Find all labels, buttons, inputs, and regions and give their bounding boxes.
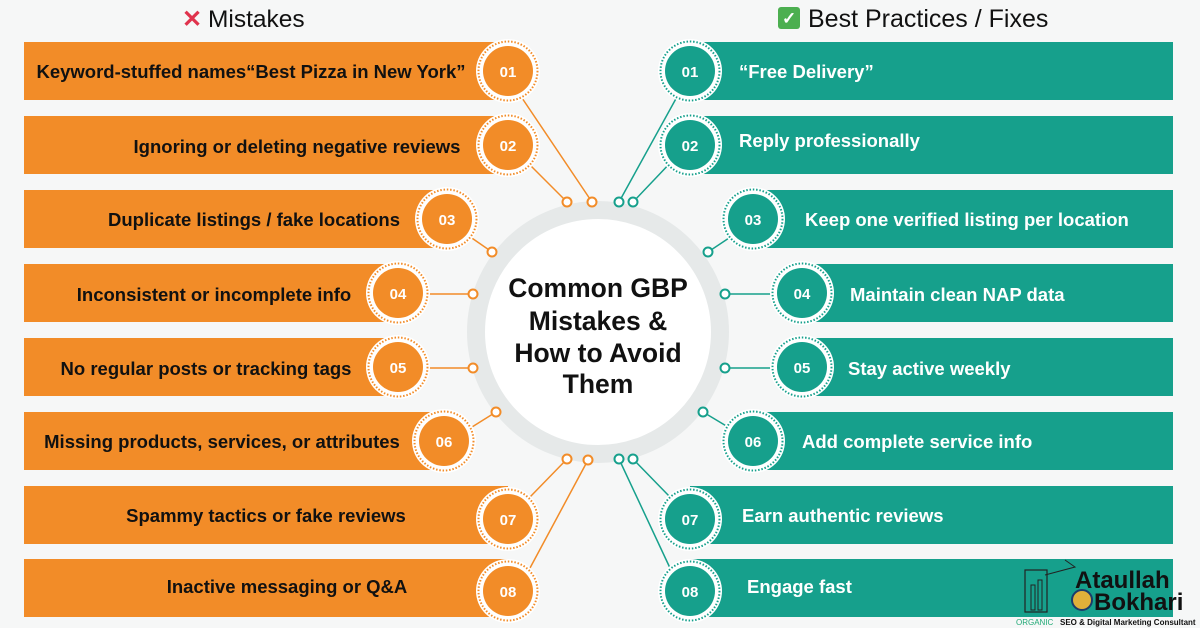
left row 04: Inconsistent or incomplete info xyxy=(77,284,351,305)
left row 01: Keyword-stuffed names“Best Pizza in New York” xyxy=(36,61,466,82)
connectors right xyxy=(614,95,772,568)
left row 01: 01 xyxy=(500,64,516,81)
right row 04: Maintain clean NAP data xyxy=(850,284,1065,305)
logo xyxy=(1016,560,1196,627)
left row 08: Inactive messaging or Q&A xyxy=(167,576,407,597)
heading: best practices: Best Practices / Fixes xyxy=(808,5,1048,33)
left row 07 xyxy=(24,486,540,551)
left row 08 xyxy=(24,559,540,623)
connectors left xyxy=(428,95,596,568)
right row 07 xyxy=(658,486,1173,551)
right row 05 xyxy=(770,335,1173,399)
left row 05: 05 xyxy=(390,360,406,377)
center circle xyxy=(476,210,720,454)
left row 02 xyxy=(24,113,540,177)
right row 03: 03 xyxy=(745,212,761,229)
center circle: How to Avoid xyxy=(514,338,682,368)
right row 03: Keep one verified listing per location xyxy=(805,209,1129,230)
right row 02: Reply professionally xyxy=(739,130,921,151)
right row 06 xyxy=(721,409,1173,473)
center circle: Them xyxy=(563,369,633,399)
right row 06: 06 xyxy=(745,434,761,451)
left row 08: 08 xyxy=(500,584,516,601)
left row 06 xyxy=(24,409,476,473)
right row 05: 05 xyxy=(794,360,810,377)
left row 03: Duplicate listings / fake locations xyxy=(108,209,400,230)
logo: ORGANIC xyxy=(1016,618,1054,627)
right row 08 xyxy=(658,559,1173,623)
left row 03: 03 xyxy=(439,212,455,229)
center circle: Common GBP xyxy=(508,273,688,303)
logo: SEO & Digital Marketing Consultant xyxy=(1060,618,1196,627)
heading: best practices: ✓ xyxy=(782,9,796,28)
left row 03 xyxy=(24,187,479,251)
left row 05 xyxy=(24,335,430,399)
left row 07: Spammy tactics or fake reviews xyxy=(126,505,406,526)
right row 08: 08 xyxy=(682,584,698,601)
right row 02: 02 xyxy=(682,138,698,155)
right row 02 xyxy=(658,113,1173,177)
heading: mistakes: Mistakes xyxy=(208,6,305,33)
left row 04 xyxy=(24,261,430,325)
left row 02: 02 xyxy=(500,138,516,155)
left row 05: No regular posts or tracking tags xyxy=(61,358,351,379)
left row 02: Ignoring or deleting negative reviews xyxy=(134,136,460,157)
right row 08: Engage fast xyxy=(747,576,852,597)
left row 07: 07 xyxy=(500,512,516,529)
left row 01 xyxy=(24,39,540,103)
logo: Bokhari xyxy=(1094,589,1183,616)
right row 06: Add complete service info xyxy=(802,431,1032,452)
right row 03 xyxy=(721,187,1173,251)
right row 01: 01 xyxy=(682,64,698,81)
left row 06: 06 xyxy=(436,434,452,451)
right row 01: “Free Delivery” xyxy=(739,61,874,82)
logo: Ataullah xyxy=(1075,567,1170,594)
center circle: Mistakes & xyxy=(529,306,667,336)
right row 05: Stay active weekly xyxy=(848,358,1011,379)
left row 04: 04 xyxy=(390,286,407,303)
left row 06: Missing products, services, or attributes xyxy=(44,431,400,452)
right row 01 xyxy=(658,39,1173,103)
right row 07: Earn authentic reviews xyxy=(742,505,944,526)
right row 07: 07 xyxy=(682,512,698,529)
right row 04 xyxy=(770,261,1173,325)
right row 04: 04 xyxy=(794,286,811,303)
heading: mistakes: ✕ xyxy=(182,6,202,33)
